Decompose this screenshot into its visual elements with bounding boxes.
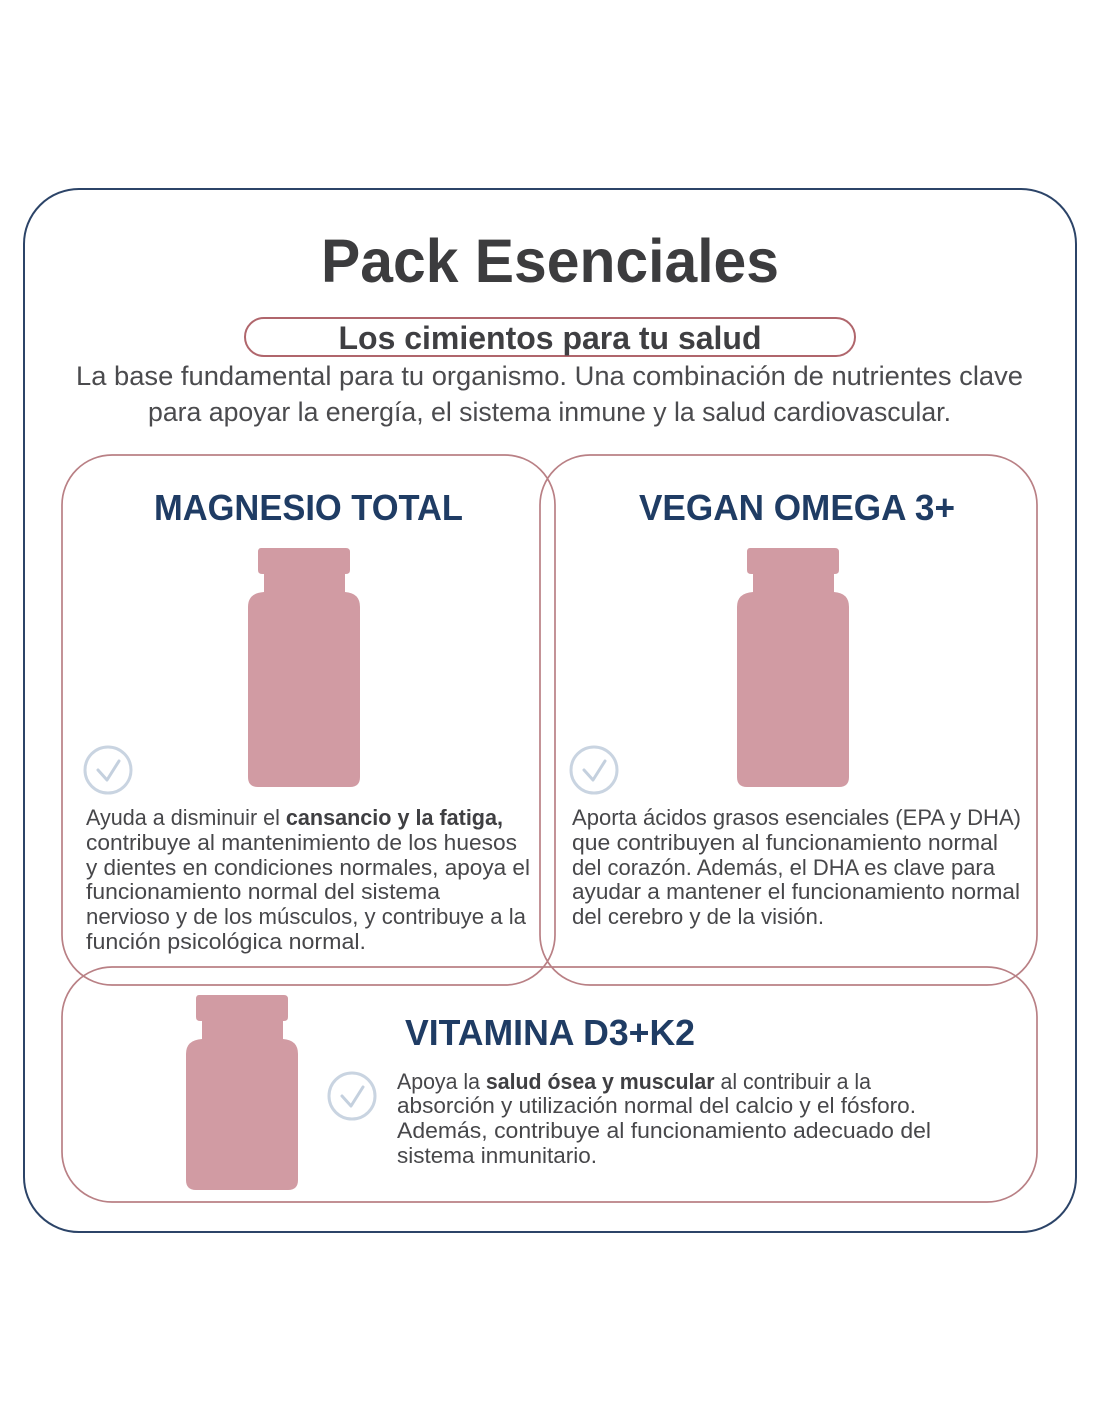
description: Aporta ácidos grasos esenciales (EPA y DHA) <box>572 805 1021 830</box>
icon: bottle <box>186 995 298 1190</box>
panel: Magnesio Total <box>62 455 555 985</box>
description: ayudar a mantener el funcionamiento normal <box>572 879 1020 904</box>
subtitle pill: Los cimientos para tu salud <box>338 320 762 356</box>
description <box>572 805 1021 929</box>
subtitle pill <box>245 318 855 356</box>
intro text: La base fundamental para tu organismo. Una combinación de nutrientes clave <box>76 361 1023 391</box>
description: que contribuyen al funcionamiento normal <box>572 830 998 855</box>
description: contribuye al mantenimiento de los huesos <box>86 830 517 855</box>
heading: Vitamina D3+K2: VITAMINA D3+K2 <box>405 1012 695 1053</box>
outer card frame <box>24 189 1076 1232</box>
icon: check <box>571 747 617 793</box>
description: nervioso y de los músculos, y contribuye a la <box>86 904 527 929</box>
description: función psicológica normal. <box>86 929 366 954</box>
panel: Vitamina D3+K2 <box>62 967 1037 1202</box>
description: Además, contribuye al funcionamiento adecuado del <box>397 1118 931 1143</box>
icon: bottle <box>248 548 360 787</box>
description: Ayuda a disminuir el cansancio y la fatiga, <box>86 805 503 830</box>
description: absorción y utilización normal del calcio y el fósforo. <box>397 1093 916 1118</box>
heading: Vegan Omega 3+: VEGAN OMEGA 3+ <box>639 487 955 528</box>
icon: check <box>329 1073 375 1119</box>
description: funcionamiento normal del sistema <box>86 879 441 904</box>
description <box>86 805 530 954</box>
description: del cerebro y de la visión. <box>572 904 824 929</box>
description <box>397 1069 931 1168</box>
panel: Vegan Omega 3+ <box>540 455 1037 985</box>
icon: bottle <box>737 548 849 787</box>
description: del corazón. Además, el DHA es clave para <box>572 855 996 880</box>
intro text: para apoyar la energía, el sistema inmune y la salud cardiovascular. <box>148 397 951 427</box>
title: Pack Esenciales <box>321 227 779 295</box>
description: Apoya la salud ósea y muscular al contribuir a la <box>397 1069 872 1094</box>
description: sistema inmunitario. <box>397 1143 597 1168</box>
heading: Magnesio Total: MAGNESIO TOTAL <box>154 487 463 528</box>
icon: check <box>85 747 131 793</box>
description: y dientes en condiciones normales, apoya el <box>86 855 530 880</box>
intro text <box>76 361 1023 427</box>
